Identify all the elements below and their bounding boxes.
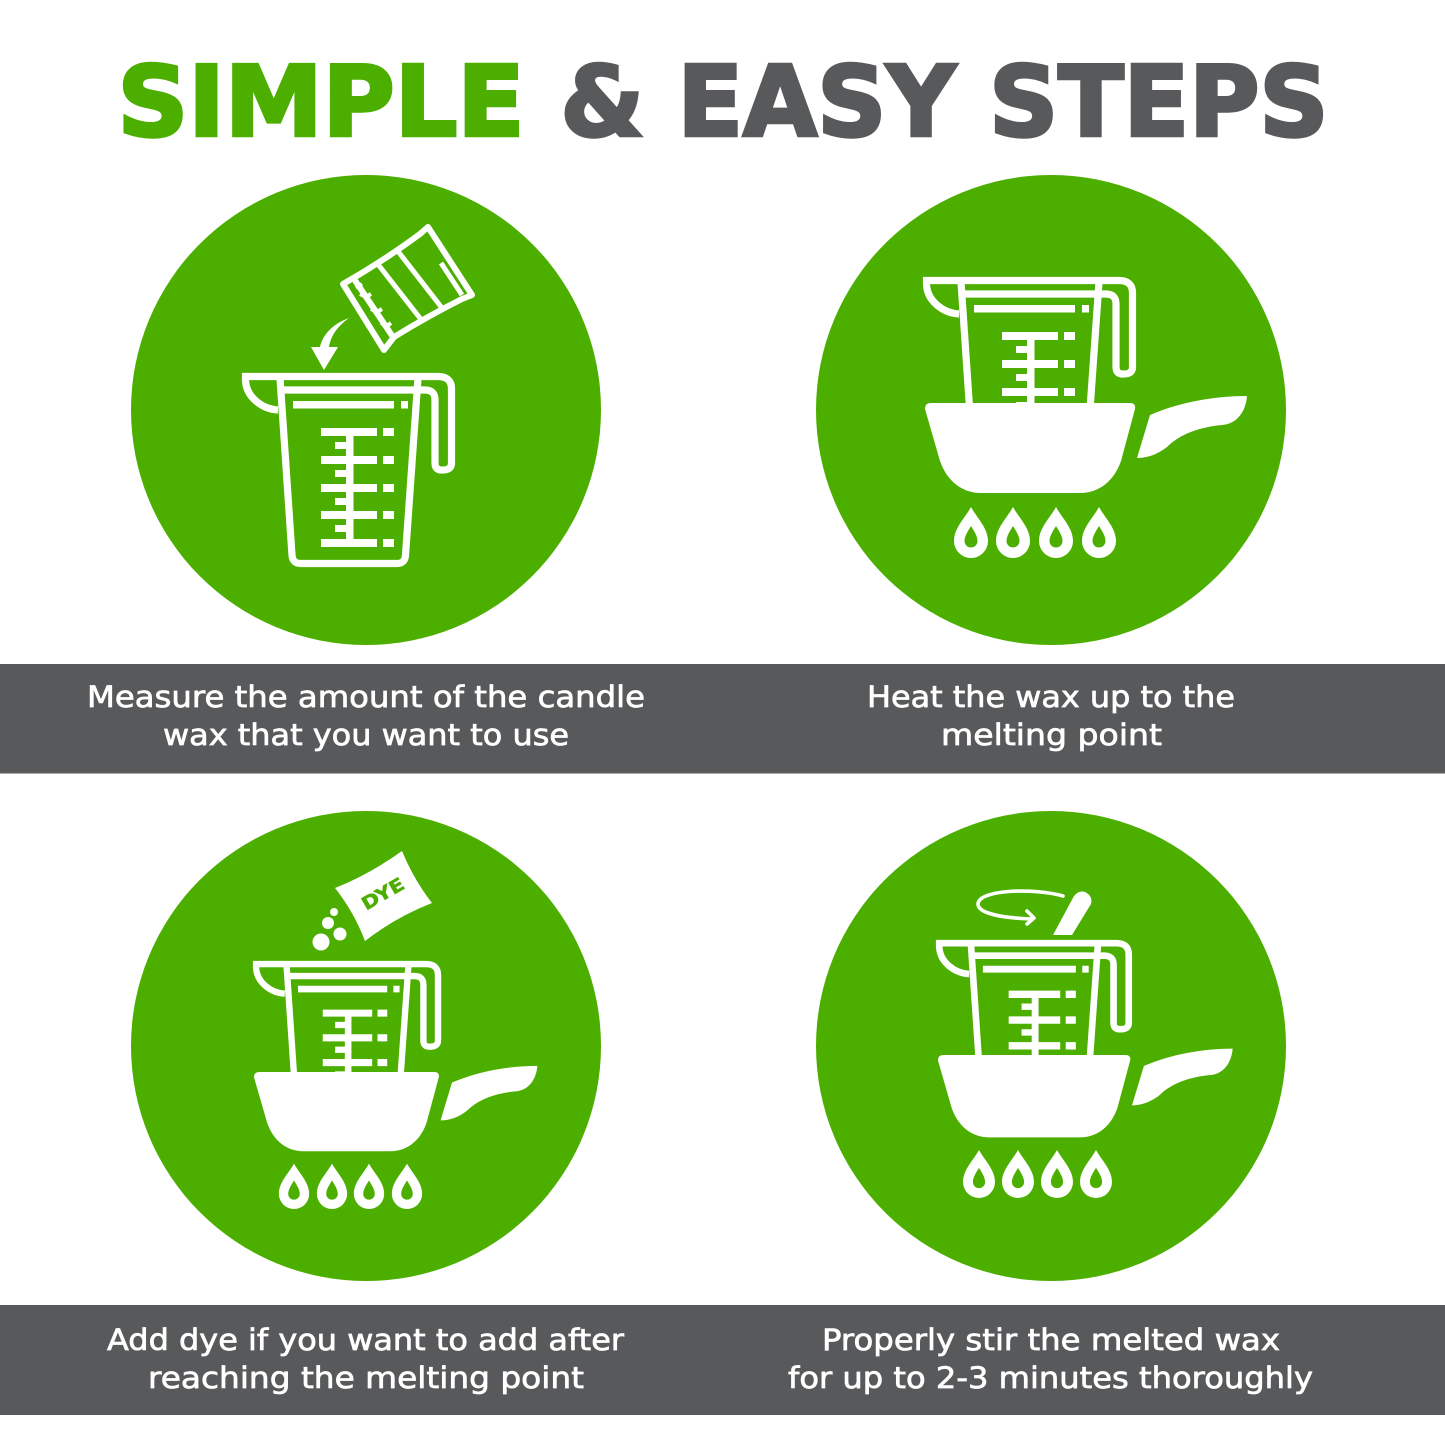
green circle 4 [816, 811, 1286, 1281]
icon: burner flames [954, 507, 1116, 558]
caption step 1 [87, 680, 645, 752]
panel: step 3 dye [131, 811, 601, 1281]
title: & EASY STEPS: & EASY STEPS [560, 46, 1328, 158]
panel: step 4 stir [816, 811, 1286, 1281]
title [118, 46, 1328, 158]
icon: jug in pan [938, 943, 1233, 1137]
dye granules [312, 908, 346, 950]
caption band top [0, 664, 1445, 774]
icon: dye packet [335, 851, 432, 941]
caption step 1: Measure the amount of the candle [87, 680, 645, 714]
icon: stir arrow [978, 891, 1063, 924]
icon: stirring spoon [1053, 892, 1091, 935]
caption step 4 [788, 1323, 1313, 1395]
green circle 1 [131, 175, 601, 645]
caption step 1: wax that you want to use [163, 718, 569, 752]
green circle 2 [816, 175, 1286, 645]
icon: wax bag [343, 227, 472, 350]
icon: burner flames [279, 1164, 422, 1209]
title: SIMPLE: SIMPLE [118, 46, 524, 158]
caption band bottom [0, 1305, 1445, 1415]
caption step 3 [107, 1323, 625, 1395]
icon: jug in pan [925, 280, 1247, 493]
icon: burner flames [963, 1150, 1112, 1198]
icon: measuring jug [246, 376, 452, 564]
panel: step 1 measure [131, 175, 601, 645]
caption step 4: for up to 2-3 minutes thoroughly [788, 1361, 1313, 1395]
caption step 3: Add dye if you want to add after [107, 1323, 625, 1357]
green circle 3 [131, 811, 601, 1281]
caption step 2 [867, 680, 1235, 752]
icon: jug in pan [254, 964, 537, 1151]
caption step 2: melting point [941, 718, 1162, 752]
icon: dye packet: DYE [358, 874, 408, 915]
caption step 2: Heat the wax up to the [867, 680, 1235, 714]
caption step 3: reaching the melting point [148, 1361, 584, 1395]
panel: step 2 heat [816, 175, 1286, 645]
caption step 4: Properly stir the melted wax [822, 1323, 1280, 1357]
arrow into jug [311, 318, 349, 370]
